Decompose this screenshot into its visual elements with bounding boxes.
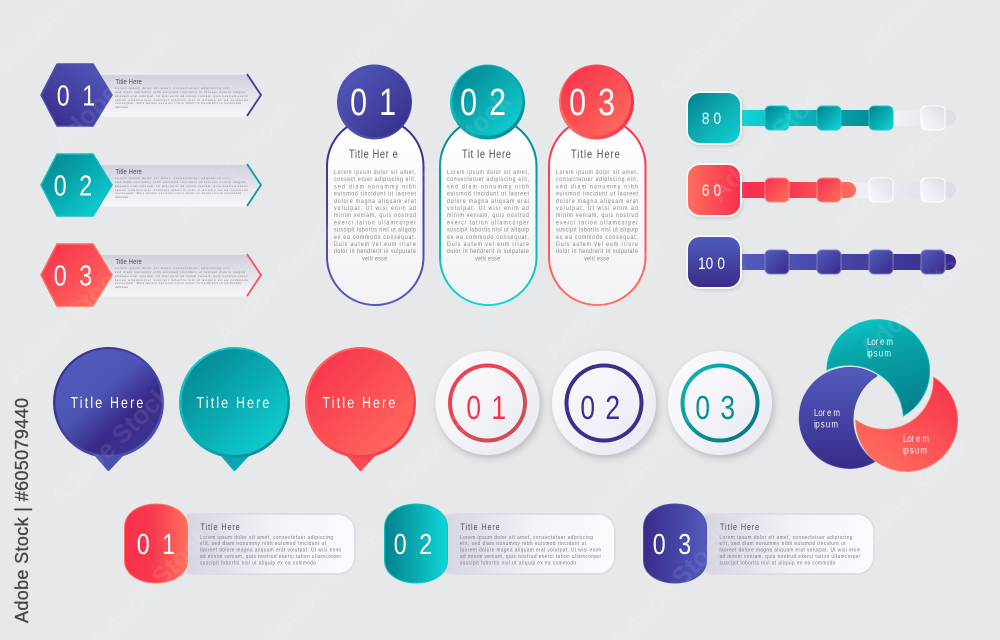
- label: navy line 2: ip s u m: [814, 419, 838, 430]
- inner circle: [182, 349, 288, 455]
- value tile: [687, 92, 741, 144]
- body text: dolor in hendrerit in vulputate: [447, 249, 529, 255]
- body text: minim veniam, quis nostrud: [334, 213, 416, 219]
- knobs: [765, 106, 945, 130]
- body text: [200, 535, 342, 567]
- body text: Duis autem vel eum iriure: [334, 242, 416, 248]
- title: Title Here: [116, 78, 142, 86]
- number 03: 0 3: [54, 259, 95, 292]
- number 02: 0 2: [460, 82, 508, 124]
- barrel badge: [644, 504, 706, 583]
- filled track: [741, 182, 856, 198]
- circle: [53, 347, 164, 458]
- badge circle 03: [559, 64, 634, 140]
- body text: sed diam nonummy nibh euismod tincidunt ut laoreet dolore magna: [115, 90, 245, 94]
- body text: Lorem ipsum dolor sit amet, consectetuer adipiscing: [720, 535, 853, 541]
- body text: laoreet dolore magna aliquam erat volutpat. Ut wisi enim: [720, 547, 861, 554]
- badge circle 01: [337, 64, 412, 140]
- ring badge 01: [436, 351, 540, 455]
- title: Title Here: [720, 522, 760, 532]
- number: 0 2: [580, 390, 622, 427]
- body text: volutpat. Ut wisi enim ad: [334, 206, 416, 212]
- body text: sed diam nonummy nibh euismod tincidunt ut laoreet dolore magna: [115, 180, 245, 184]
- number: 0 1: [137, 527, 178, 561]
- body text: [334, 170, 416, 263]
- stock watermark: Adobe Stock: [208, 215, 342, 349]
- body text: ad minim veniam, quis nostrud exerci tation ullamcorper: [200, 554, 341, 560]
- body text: [460, 535, 602, 567]
- body text: consequat. Duis autem vel eum iriure dolor in hendrerit in vulputate: [115, 281, 241, 285]
- title: Title Here: [196, 394, 269, 411]
- disc: [436, 351, 540, 455]
- stock watermark: Adobe Stock: [43, 378, 177, 512]
- title: Title Here: [70, 394, 143, 411]
- circle: [305, 347, 416, 458]
- ring: [682, 366, 758, 440]
- empty track: [840, 182, 956, 198]
- body text: consequat. Duis autem vel eum iriure dolor in hendrerit in vulputate: [115, 191, 241, 195]
- bottom card 03: [644, 504, 874, 583]
- value: 8 0: [702, 110, 721, 128]
- segment: navy: [799, 367, 877, 468]
- title: Title Here: [322, 394, 395, 411]
- body text: tation ullamcorper suscipit lobortis nisl ut aliquip ex ea commodo: [115, 188, 248, 192]
- inner circle: [56, 349, 162, 455]
- title: Title Here: [571, 149, 620, 161]
- number 03: 0 3: [569, 82, 617, 124]
- balloon: red: [305, 347, 416, 471]
- bottom card 02: [384, 504, 615, 583]
- number 01: 0 1: [57, 79, 98, 112]
- body text: Lorem ipsum dolor sit amet, consectetuer adipiscing: [200, 535, 333, 541]
- body text: Lorem ipsum dolor sit amet, consectetuer adipiscing: [460, 535, 593, 541]
- segment: red: [856, 377, 958, 472]
- body text: Lorem ipsum dolor sit amet, consectetuer adipiscing elit,: [115, 86, 231, 90]
- banner arrow 03: [247, 254, 261, 296]
- barrel badge: [124, 504, 188, 583]
- value: 10 0: [698, 255, 725, 273]
- badge inner 03: [561, 66, 631, 136]
- body text: volutpat. Ut wisi enim ad: [556, 206, 638, 212]
- body text: elit, sed diam nonummy nibh euismod tincidunt ut: [200, 541, 326, 547]
- filled track: [741, 110, 893, 126]
- body text: dolore magna aliquam erat: [556, 198, 638, 205]
- stock watermark: Adobe Stock: [853, 230, 987, 364]
- body text: velit esse: [115, 195, 128, 199]
- body text: Lorem ipsum dolor sit amet,: [556, 170, 638, 176]
- number 01: 0 1: [350, 82, 398, 124]
- body text: tation ullamcorper suscipit lobortis nisl ut aliquip ex ea commodo: [115, 98, 248, 102]
- number: 0 2: [394, 527, 435, 561]
- body text: Lorem ipsum dolor sit amet,: [334, 170, 416, 176]
- body text: tation ullamcorper suscipit lobortis nisl ut aliquip ex ea commodo: [115, 278, 248, 282]
- circle: [179, 347, 290, 458]
- hexagon 03: [41, 244, 112, 306]
- disc: [552, 351, 656, 455]
- body text: sed diam nonummy nibh: [447, 184, 529, 191]
- body text: ad minim veniam, quis nostrud exerci tation ullamcorper: [460, 554, 601, 560]
- body text: [447, 170, 529, 263]
- knobs: [765, 250, 945, 274]
- value: 6 0: [702, 182, 721, 200]
- number: 0 3: [695, 390, 737, 427]
- ring badge 03: [668, 351, 772, 455]
- inner circle: [308, 349, 414, 455]
- card outline 03: [549, 118, 646, 305]
- stock watermark: Adobe Stock: [826, 107, 960, 241]
- balloon: teal: [179, 347, 290, 471]
- triad cycle diagram: [799, 320, 958, 472]
- body text: Duis autem vel eum iriure: [447, 242, 529, 248]
- stock watermark: Adobe Stock: [46, 22, 180, 156]
- stock watermark: Adobe Stock: [583, 390, 717, 524]
- badge inner 01: [340, 66, 412, 138]
- body text: elit, sed diam nonummy nibh euismod tincidunt ut: [720, 541, 846, 547]
- body text: ex ea commodo consequat.: [447, 234, 529, 241]
- body text: [115, 266, 248, 289]
- body text: dolore magna aliquam erat: [447, 198, 529, 205]
- body text: Lorem ipsum dolor sit amet, consectetuer adipiscing elit,: [115, 176, 231, 180]
- body text: aliquam erat volutpat. Ut wisi enim ad minim veniam, quis nostrud exerci: [115, 94, 248, 98]
- stock watermark: Adobe Stock: [538, 232, 672, 366]
- badge circle 02: [450, 64, 525, 140]
- panel: hexagon banner 03: [41, 244, 261, 306]
- label: red line 2: ip s u m: [903, 445, 927, 456]
- body text: suscipit lobortis nisl ut aliquip: [334, 227, 416, 234]
- body text: consectetuer adipiscing elit,: [447, 177, 529, 183]
- body text: suscipit lobortis nisl ut aliquip ex ea commodo: [200, 560, 316, 567]
- body text: dolor in hendrerit in vulputate: [334, 249, 416, 255]
- body text: suscipit lobortis nisl ut aliquip ex ea commodo: [460, 560, 576, 567]
- stock watermark: Adobe Stock: [0, 255, 133, 389]
- body text: euismod tincidunt ut laoreet: [447, 191, 529, 198]
- pointer: [346, 455, 376, 471]
- panel: hexagon banner 01: [41, 64, 261, 126]
- panel: hexagon banner 02: [41, 154, 261, 216]
- body text: exerci tation ullamcorper: [556, 220, 638, 227]
- banner strip 02: [100, 164, 261, 206]
- stock watermark: Adobe Stock: [703, 73, 837, 207]
- body text: volutpat. Ut wisi enim ad: [447, 206, 529, 212]
- body text: minim veniam, quis nostrud: [447, 213, 529, 219]
- body text: exerci tation ullamcorper: [334, 220, 416, 227]
- body text: sed diam nonummy nibh: [334, 184, 416, 191]
- badge inner 02: [452, 66, 522, 136]
- stock watermark: Adobe Stock: [383, 85, 517, 219]
- title: Title Here: [200, 522, 240, 532]
- body text: velit esse: [584, 256, 610, 263]
- label: navy: Lor e m: [814, 407, 840, 418]
- hexagon 02: [41, 154, 112, 216]
- progress bar: 100: [687, 236, 956, 288]
- body text: sed diam nonummy nibh: [556, 184, 638, 191]
- body text: velit esse: [115, 285, 128, 289]
- disc: [668, 351, 772, 455]
- barrel badge: [384, 504, 448, 583]
- title: Title Her e: [349, 149, 398, 161]
- body text: consequat. Duis autem vel eum iriure dolor in hendrerit in vulputate: [115, 101, 241, 105]
- progress bar: 80: [687, 92, 956, 144]
- body text: consectetuer adipiscing elit,: [556, 177, 638, 183]
- text panel: [435, 514, 615, 574]
- progress bar: 60: [687, 164, 956, 216]
- empty track: [893, 110, 956, 126]
- title: Title Here: [116, 168, 142, 176]
- body text: sed diam nonummy nibh euismod tincidunt ut laoreet dolore magna: [115, 270, 245, 274]
- number: 0 1: [466, 390, 508, 427]
- body text: ad minim veniam, quis nostrud exerci tation ullamcorper: [720, 554, 861, 560]
- body text: velit esse: [362, 256, 388, 263]
- body text: exerci tation ullamcorper: [447, 220, 529, 227]
- body text: elit, sed diam nonummy nibh euismod tincidunt ut: [460, 541, 586, 547]
- stock watermark: Adobe Stock: [378, 370, 512, 504]
- body text: ex ea commodo consequat.: [556, 234, 638, 241]
- label: red: Lor e m: [903, 433, 929, 444]
- value tile: [687, 236, 741, 288]
- body text: euismod tincidunt ut laoreet: [556, 191, 638, 198]
- body text: [115, 176, 248, 199]
- ring: [450, 366, 525, 440]
- stock watermark: Adobe Stock: [168, 92, 302, 226]
- body text: Lorem ipsum dolor sit amet, consectetuer adipiscing elit,: [115, 266, 231, 270]
- banner strip 03: [100, 254, 261, 296]
- ring: [566, 366, 642, 440]
- body text: Lorem ipsum dolor sit amet,: [447, 170, 529, 176]
- bottom card 01: [124, 504, 355, 583]
- body text: velit esse: [475, 256, 501, 263]
- text panel: [175, 514, 355, 574]
- ring badge 02: [552, 351, 656, 455]
- body text: Duis autem vel eum iriure: [556, 242, 638, 248]
- hexagon 01: [41, 64, 112, 126]
- banner arrow 01: [247, 74, 261, 116]
- body text: minim veniam, quis nostrud: [556, 213, 638, 219]
- body text: [556, 170, 638, 263]
- knobs: [765, 178, 945, 202]
- stock id label: Adobe Stock | #605079440: [12, 398, 32, 623]
- title: Tit le Here: [462, 149, 511, 161]
- body text: [115, 86, 248, 109]
- body text: [720, 535, 861, 567]
- body text: suscipit lobortis nisl ut aliquip: [556, 227, 638, 234]
- body text: velit esse: [115, 105, 128, 109]
- panel: oval card 02: [440, 64, 536, 305]
- title: Title Here: [116, 258, 142, 266]
- body text: ex ea commodo consequat.: [334, 234, 416, 241]
- number 02: 0 2: [54, 169, 95, 202]
- balloon: navy: [53, 347, 164, 471]
- pointer: [94, 455, 124, 471]
- body text: laoreet dolore magna aliquam erat volutpat. Ut wisi enim: [200, 547, 342, 554]
- title: Title Here: [460, 522, 500, 532]
- segment: teal: [827, 320, 930, 416]
- body text: laoreet dolore magna aliquam erat volutpat. Ut wisi enim: [460, 547, 602, 554]
- card outline 02: [440, 118, 536, 305]
- body text: suscipit lobortis nisl ut aliquip ex ea commodo: [720, 560, 836, 567]
- pointer: [220, 455, 250, 471]
- label: teal line 2: ip s u m: [867, 348, 891, 359]
- label: teal: Lor e m: [867, 336, 893, 347]
- value tile: [687, 164, 741, 216]
- body text: aliquam erat volutpat. Ut wisi enim ad minim veniam, quis nostrud exerci: [115, 274, 248, 278]
- body text: consect etuer adipiscing elit,: [334, 177, 416, 183]
- panel: oval card 03: [549, 64, 646, 305]
- body text: dolore magna aliquam erat: [334, 198, 416, 205]
- text panel: [694, 514, 874, 574]
- body text: dolor in hendrerit in vulputate: [556, 249, 638, 255]
- panel: oval card 01: [327, 64, 424, 305]
- card outline 01: [327, 118, 424, 305]
- stock watermark: Adobe Stock: [843, 430, 977, 564]
- body text: suscipit lobortis nisl ut aliquip: [447, 227, 529, 234]
- body text: euismod tincidunt ut laoreet: [334, 191, 416, 198]
- filled track: [741, 254, 956, 270]
- banner strip 01: [100, 74, 261, 116]
- number: 0 3: [653, 527, 694, 561]
- body text: aliquam erat volutpat. Ut wisi enim ad minim veniam, quis nostrud exerci: [115, 184, 248, 188]
- banner arrow 02: [247, 164, 261, 206]
